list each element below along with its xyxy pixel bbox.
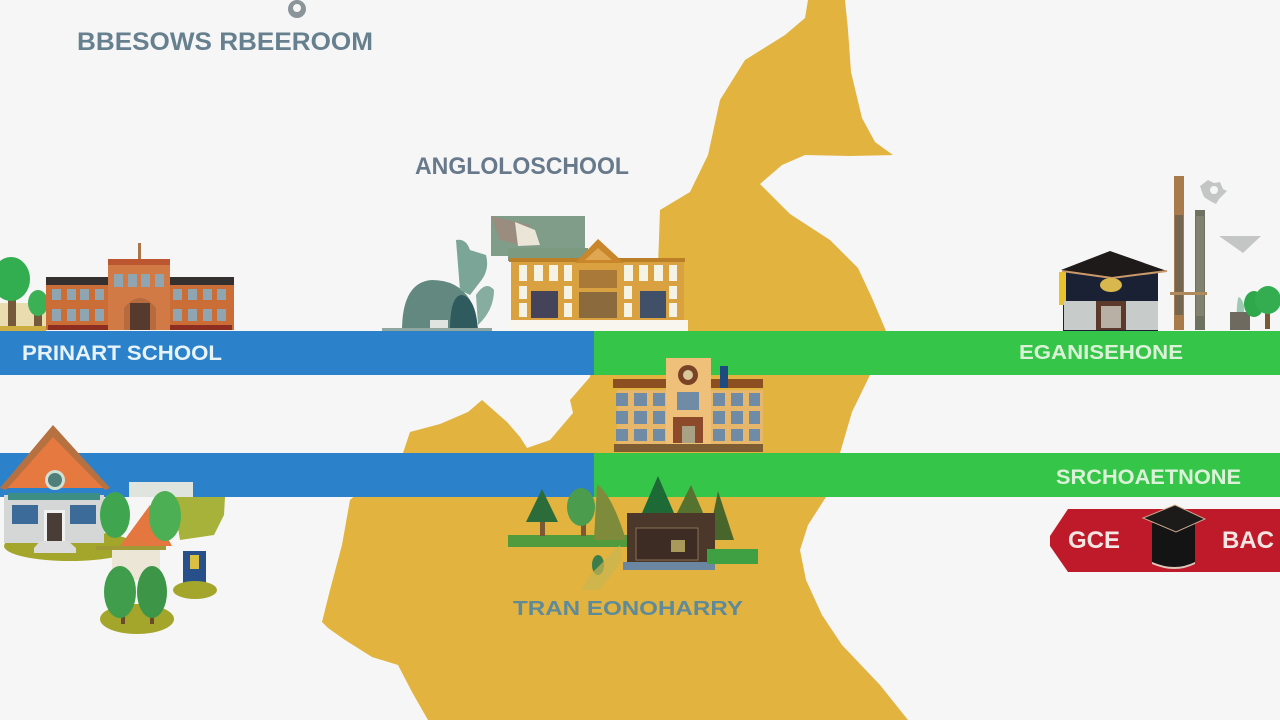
heading: anglo school: ANGLOLOSCHOOL [415,153,629,180]
badge: GCE BAC [1050,505,1280,572]
icon: graduation cap [1143,505,1205,569]
bar: upper green [594,331,1280,375]
icon: green statue [382,240,494,331]
top icon fragment [288,0,306,18]
title: BBESOWS RBEEROOM [77,28,373,56]
label: primary school: PRINART SCHOOL [22,342,222,365]
icon: forest school [508,476,758,590]
label: GCE: GCE [1068,527,1120,554]
bar: lower green [594,453,1280,497]
map silhouette [322,0,908,720]
icon: trees left top [0,257,48,331]
label: upper green bar: EGANISEHONE [1019,342,1183,364]
icon: secondary school building [613,358,763,452]
icon: university building with chimneys [1059,176,1280,332]
heading: transition: TRAN EONOHARRY [513,598,744,620]
icon: primary school building [46,243,234,330]
label: lower green bar: SRCHOAETNONE [1056,466,1241,489]
icon: anglo school building [491,216,688,331]
label: BAC: BAC [1222,527,1274,554]
icon: house and garden [0,425,225,634]
bar: primary school (blue) [0,331,594,375]
bar: lower blue [0,453,594,497]
